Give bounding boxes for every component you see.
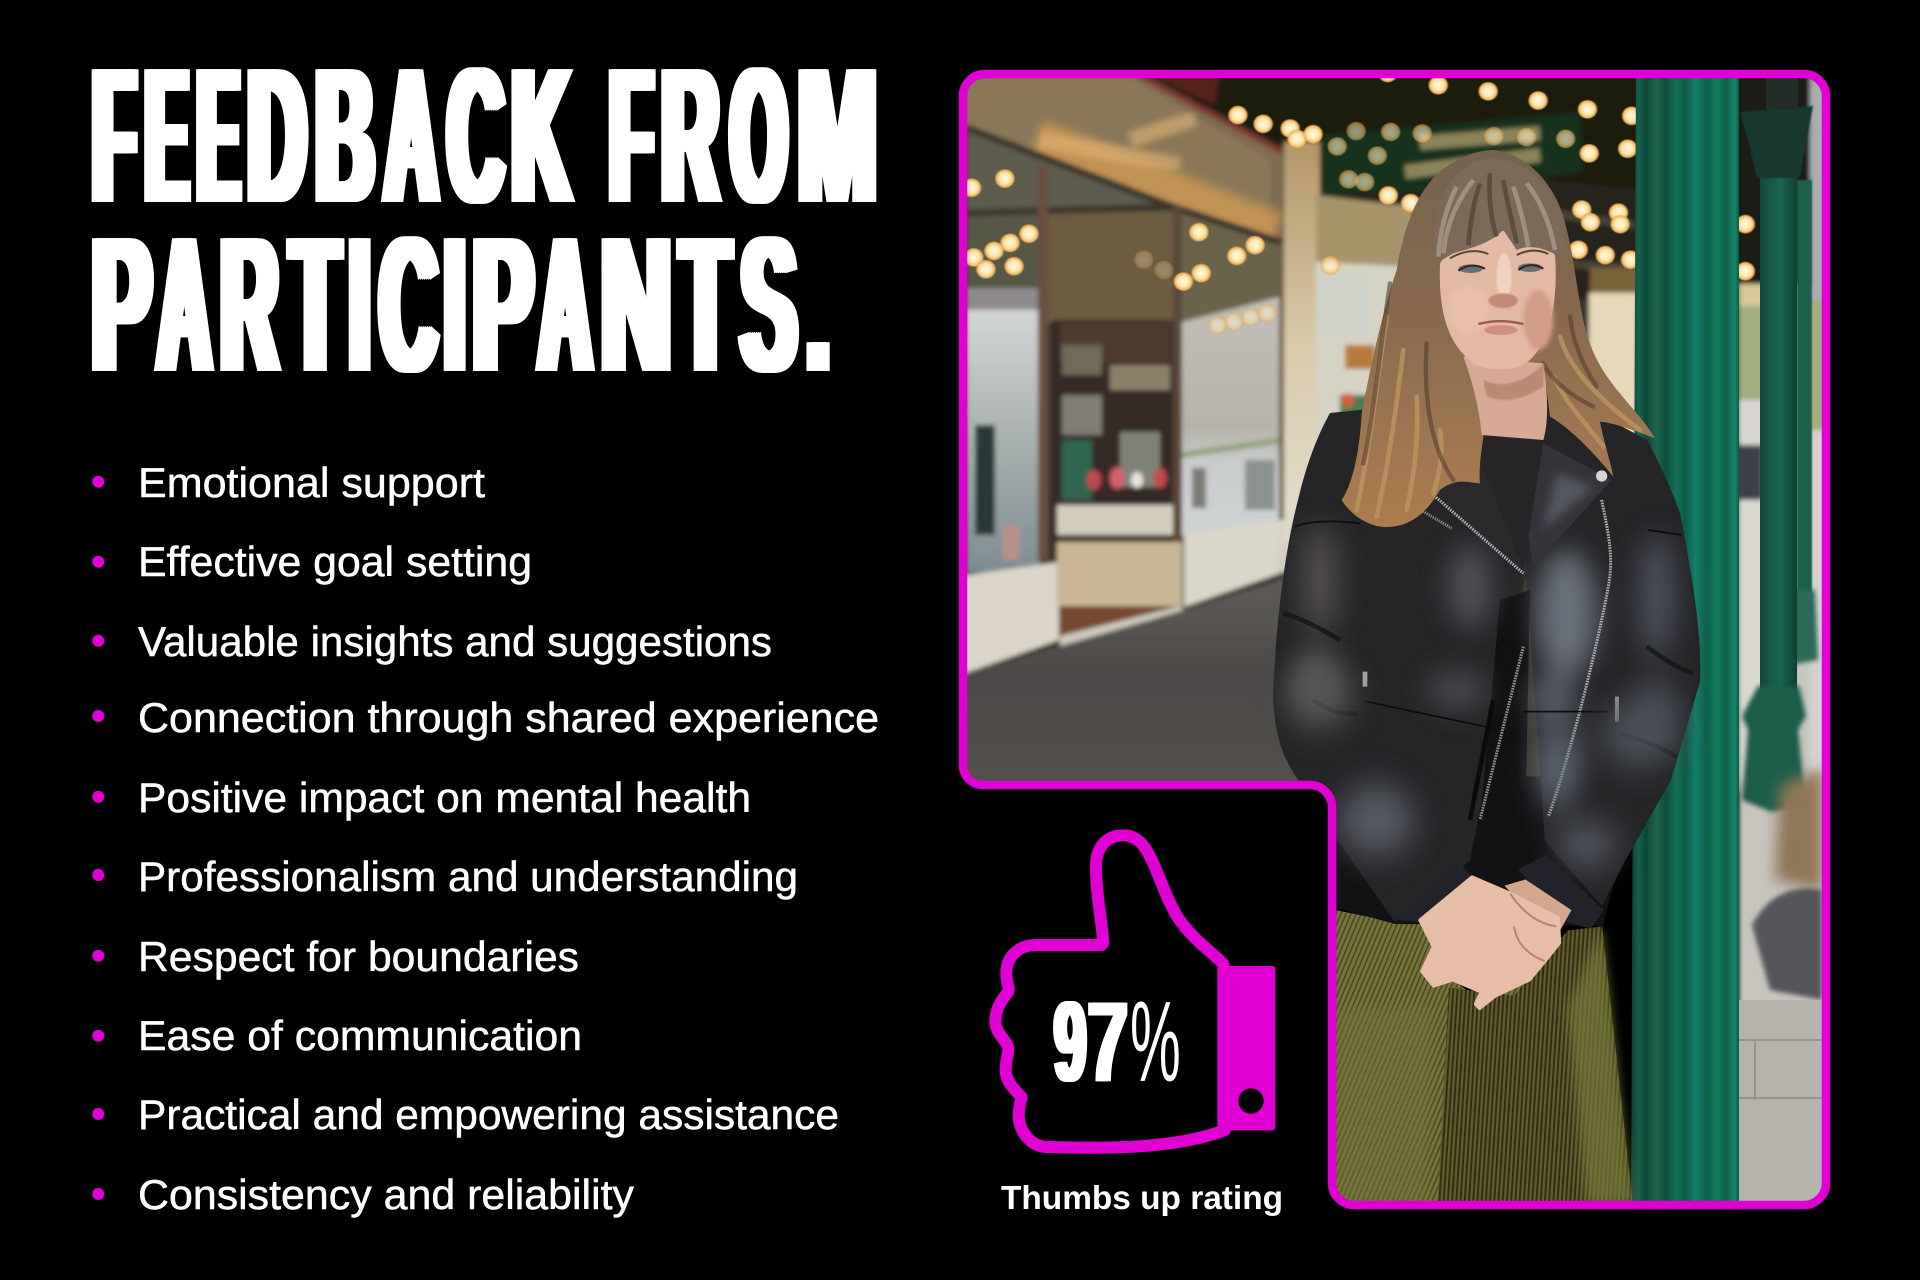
right-hand background	[1739, 280, 1822, 1000]
green iron column and far pillars	[1631, 70, 1822, 1205]
title: F	[87, 27, 129, 243]
title: N	[594, 196, 665, 412]
caption: thumbs up rating: Thumbs up rating	[1001, 1179, 1283, 1216]
stat: 97%: 9	[1051, 979, 1083, 1106]
stat: 97%: 7	[1085, 979, 1126, 1106]
title: O	[725, 27, 781, 243]
title: D	[242, 27, 300, 243]
title: B	[310, 27, 367, 243]
title: T	[285, 196, 333, 412]
list item 7: Respect for boundaries	[138, 933, 579, 980]
list item 9: Practical and empowering assistance	[138, 1091, 839, 1138]
panel: photo of woman in front of shop arcade	[960, 63, 1830, 1210]
icon: thumbs up	[995, 835, 1275, 1148]
stat: 97%	[1051, 979, 1181, 1106]
list item 5: Positive impact on mental health	[138, 774, 751, 821]
list item 6: Professionalism and understanding	[138, 853, 798, 900]
title: I	[344, 196, 364, 412]
title: A	[533, 196, 585, 412]
title: S	[735, 196, 791, 412]
woman: black tee	[1524, 562, 1526, 583]
woman: leather jacket	[1273, 400, 1700, 922]
title: E	[192, 27, 233, 243]
woman: skirt	[1336, 910, 1633, 1204]
title: P	[467, 196, 527, 412]
bullet list	[92, 459, 879, 1218]
list item 8: Ease of communication	[138, 1012, 582, 1059]
photo frame outline	[963, 74, 1826, 1205]
title: K	[506, 27, 564, 243]
title: C	[374, 196, 431, 412]
bokeh light bulbs	[961, 63, 1756, 335]
title: F	[604, 27, 647, 243]
title: A	[152, 196, 204, 412]
title: T	[675, 196, 724, 412]
title: R	[656, 27, 712, 243]
title: .	[801, 196, 823, 412]
title: P	[86, 196, 145, 412]
list item 10: Consistency and reliability	[138, 1171, 634, 1218]
list item 2: Effective goal setting	[138, 538, 532, 585]
title: C	[442, 27, 497, 243]
list item 1: Emotional support	[138, 459, 485, 506]
title: E	[140, 27, 181, 243]
list item 4: Connection through shared experience	[138, 694, 879, 741]
woman: undershirt hem	[1336, 776, 1614, 926]
title: I	[439, 196, 459, 412]
title: M	[792, 27, 870, 243]
woman: sleeve cuffs and hands	[1397, 855, 1604, 1008]
title: A	[379, 27, 431, 243]
title	[86, 27, 876, 412]
woman: head and hair	[1342, 150, 1655, 527]
stat: 97%: %	[1130, 979, 1181, 1106]
title: R	[215, 196, 271, 412]
photo background: blurred shopfront	[967, 78, 1822, 1000]
list item 3: Valuable insights and suggestions	[138, 618, 772, 665]
